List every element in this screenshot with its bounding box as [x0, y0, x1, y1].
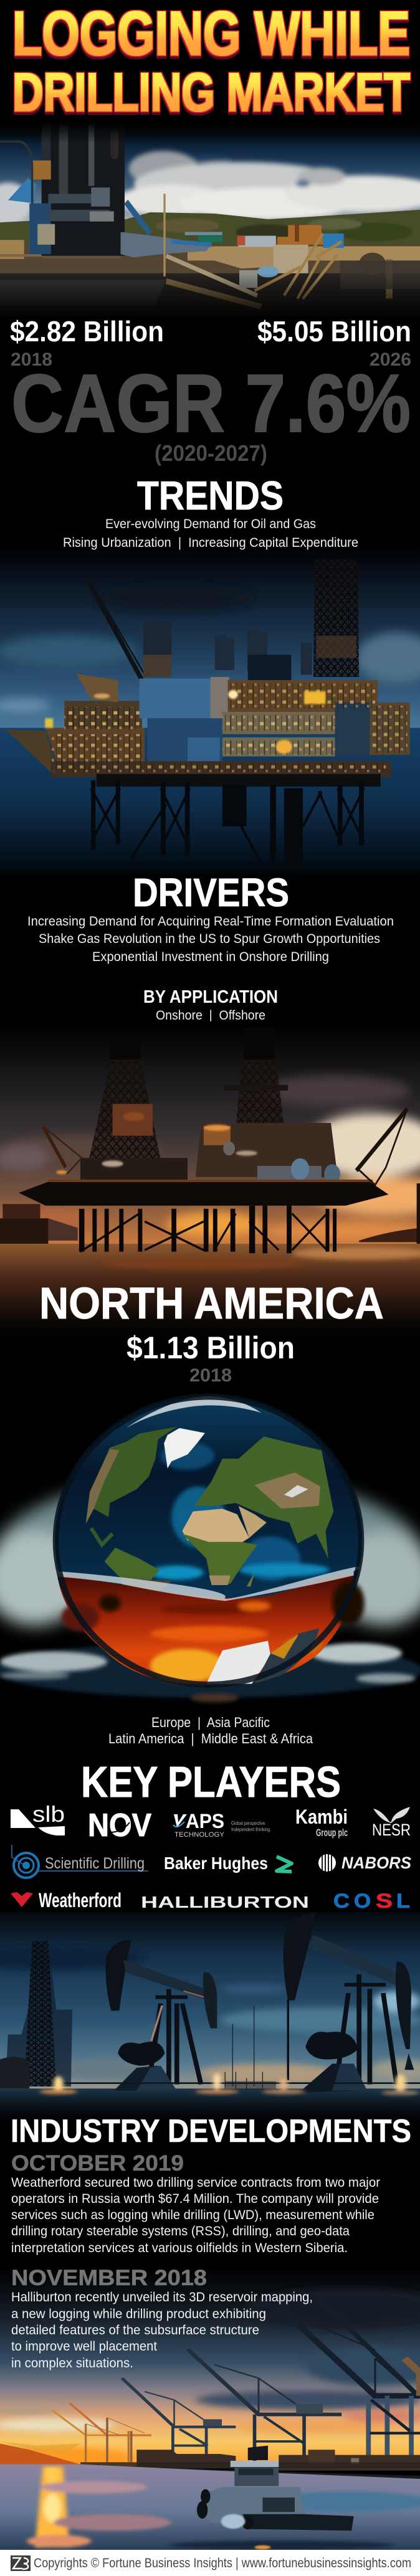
logo: COSL: C — [333, 1890, 350, 1912]
logo: COSL — [333, 1890, 410, 1912]
development text: Weatherford: Weatherford secured two drilling service contracts from two major — [11, 2176, 380, 2190]
development date: October 2019: OCTOBER 2019 — [11, 2151, 184, 2176]
development text: Weatherford: drilling rotary steerable systems (RSS), drilling, and geo-data — [11, 2224, 350, 2238]
tugboat — [196, 2446, 354, 2549]
heading: key players: KEY PLAYERS — [81, 1758, 341, 1806]
logo: Kambi — [295, 1806, 348, 1839]
logo: SLB — [11, 1801, 65, 1835]
logo: APS Technology — [173, 1810, 271, 1839]
distant derrick — [0, 1941, 72, 2088]
footer — [0, 2550, 420, 2576]
glow behind globe — [0, 1475, 420, 1637]
platform deck and modules — [19, 1112, 389, 1206]
large crane — [188, 2349, 341, 2466]
2018 label: 2018 — [189, 1365, 232, 1386]
logo: Weatherford: Weatherford — [39, 1889, 122, 1911]
north america market value: $1.13 Billion — [126, 1330, 295, 1365]
water ripples — [0, 1642, 420, 1702]
heading: drivers: DRIVERS — [133, 870, 289, 915]
logo: Baker Hughes: Baker Hughes — [164, 1854, 268, 1873]
development text: Weatherford: interpretation services at various oilfields in Western Siberia. — [11, 2241, 348, 2255]
logo: APS Technology: TECHNOLOGY — [174, 1831, 225, 1839]
far platform — [0, 1183, 420, 1244]
railing and lights — [35, 2005, 420, 2095]
development text: Weatherford — [11, 2176, 380, 2255]
development text: Halliburton: to improve well placement — [11, 2339, 157, 2354]
by application — [143, 987, 278, 1023]
rig tower — [0, 122, 125, 256]
drivers list: Increasing Demand for Acquiring Real-Time Formation Evaluation — [27, 914, 394, 929]
development text: Halliburton: a new logging while drilling product exhibiting — [11, 2307, 266, 2321]
development date: November 2018: NOVEMBER 2018 — [11, 2266, 207, 2290]
continents — [86, 1427, 333, 1621]
logo: APS Technology: Global perspective. — [231, 1820, 266, 1826]
logo: COSL: S — [376, 1890, 393, 1912]
footer logo — [11, 2555, 31, 2571]
other regions: Europe | Asia Pacific — [151, 1715, 270, 1730]
mid crane — [122, 2378, 236, 2465]
logo: APS Technology: APS — [186, 1810, 224, 1832]
market value 2018: 2018 — [11, 349, 52, 370]
logo: COSL: L — [396, 1890, 410, 1912]
development text: Halliburton: detailed features of the subsurface structure — [11, 2323, 259, 2337]
market value 2026: $5.05 Billion — [257, 315, 411, 348]
market value 2026: 2026 — [370, 349, 411, 370]
logo: Nabors: NABORS — [341, 1854, 411, 1872]
scene: offshore platform at night — [0, 547, 420, 884]
heading: trends: TRENDS — [137, 473, 284, 518]
left derrick — [86, 1037, 163, 1174]
drilling hoses and machinery — [121, 194, 276, 277]
containers and dock — [80, 2450, 420, 2479]
drivers list: Shake Gas Revolution in the US to Spur Growth Opportunities — [39, 932, 380, 946]
platform legs — [91, 780, 364, 871]
crane — [87, 579, 146, 680]
drivers list — [27, 914, 394, 964]
far cranes — [52, 2403, 151, 2462]
near cranes — [280, 2301, 420, 2466]
scene: onshore drilling site photo — [0, 122, 420, 320]
drivers list: Exponential Investment in Onshore Drilling — [92, 950, 329, 964]
logo: NOV: NOV — [88, 1807, 151, 1844]
heading: north america: NORTH AMERICA — [39, 1279, 384, 1328]
development text: Halliburton: in complex situations. — [11, 2356, 133, 2370]
development text: Weatherford: operators in Russia worth $67.4 Million. The company will provide — [11, 2192, 379, 2206]
chimney stacks — [143, 622, 312, 683]
logo: Kambi: Kambi — [295, 1806, 348, 1828]
logo: COSL: O — [354, 1890, 371, 1912]
glass highlight — [126, 1396, 261, 1428]
globe scene — [0, 1396, 420, 1702]
market value 2026 — [257, 315, 411, 370]
other regions — [108, 1715, 313, 1746]
trends list: Ever-evolving Demand for Oil and Gas — [105, 517, 316, 531]
development text: Halliburton: Halliburton recently unveiled its 3D reservoir mapping, — [11, 2290, 313, 2304]
logo: Scientific Drilling: Scientific Drilling — [45, 1855, 145, 1872]
derrick — [313, 559, 359, 677]
market value 2018: $2.82 Billion — [10, 315, 164, 348]
scene: port cranes and tugboat at sunset — [0, 2267, 420, 2550]
site materials: barrels, crates and poles — [166, 224, 420, 306]
scene: pumpjacks at dusk — [0, 1912, 420, 2122]
logo: NESR: NESR — [372, 1821, 411, 1839]
scene: offshore rigs at sunset — [0, 1021, 420, 1339]
right derrick — [224, 1028, 288, 1126]
pumpjack right — [284, 1912, 414, 2093]
logo: NESR — [372, 1807, 411, 1839]
other regions: Latin America | Middle East & Africa — [108, 1731, 313, 1746]
CAGR period: (2020-2027) — [155, 440, 267, 466]
lava lower half — [57, 1567, 365, 1685]
logo: Halliburton: HALLIBURTON — [141, 1893, 309, 1911]
logo: Scientific Drilling — [12, 1845, 148, 1878]
by application: Onshore | Offshore — [156, 1008, 265, 1023]
pumpjack left — [105, 1940, 217, 2091]
by application: BY APPLICATION — [143, 987, 278, 1007]
platform decks — [6, 674, 410, 787]
trends list — [63, 517, 358, 550]
logo: Kambi: Group plc — [316, 1827, 348, 1839]
logo: APS Technology: Independent thinking. — [231, 1826, 271, 1832]
logo: SLB: slb — [32, 1801, 65, 1827]
title — [12, 0, 410, 123]
market value 2018 — [10, 315, 164, 370]
trends list: Rising Urbanization | Increasing Capital Expenditure — [63, 536, 358, 550]
development text: Weatherford: services such as logging while drilling (LWD), measurement while — [11, 2208, 375, 2222]
cranes — [43, 1109, 408, 1185]
development text: Halliburton — [11, 2290, 313, 2370]
logo: Weatherford — [11, 1889, 122, 1911]
platform legs — [79, 1206, 336, 1253]
harbour water — [0, 2465, 420, 2550]
earth — [55, 1396, 365, 1685]
